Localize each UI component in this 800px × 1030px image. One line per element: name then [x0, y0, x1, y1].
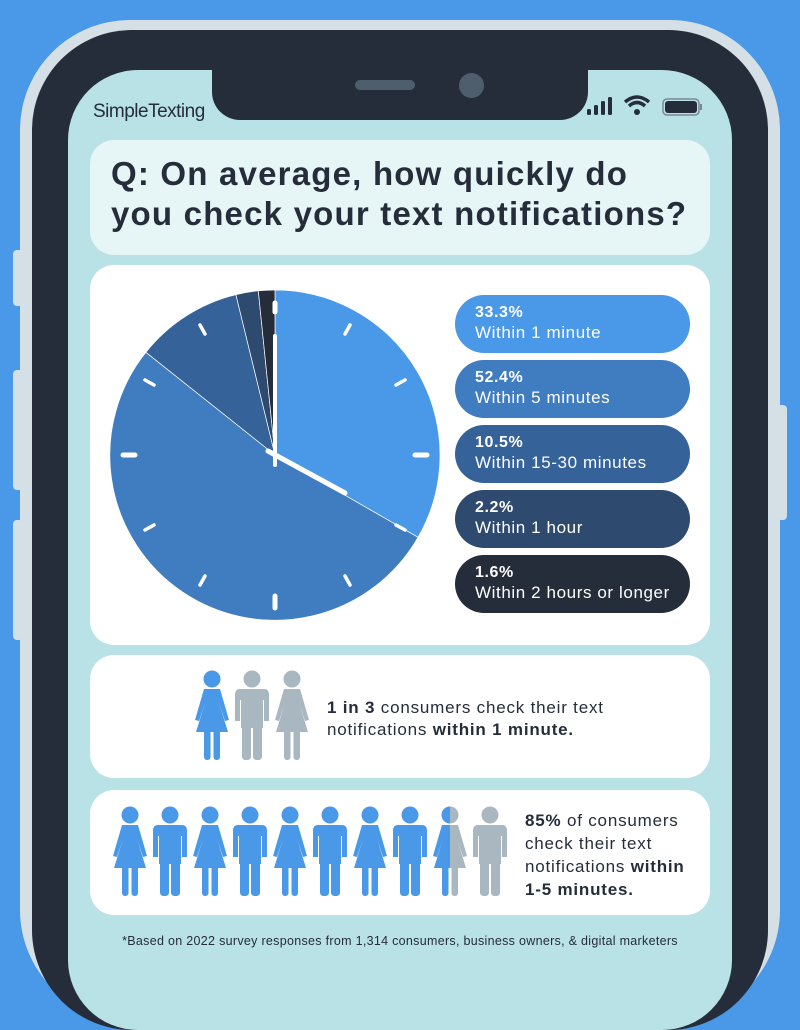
- text: 85%: notifications within: [525, 857, 685, 876]
- side buttons: [13, 250, 23, 306]
- text: 1 in 3: notifications within 1 minute.: [327, 720, 574, 739]
- legend: [455, 295, 690, 613]
- legend item 1: Within 1 minute: [475, 323, 601, 342]
- legend item 4: Within 1 hour: [475, 518, 583, 537]
- panel: 85%: [90, 790, 710, 915]
- text: 85%: check their text: [525, 834, 652, 853]
- footnote: *Based on 2022 survey responses from 1,314 consumers, business owners, & digital marketers: [122, 934, 678, 948]
- legend item 5: Within 2 hours or longer: [475, 583, 670, 602]
- legend item 2: [455, 360, 690, 418]
- legend item 2: 52.4%: [475, 369, 523, 386]
- people icons: 85%: [113, 806, 507, 896]
- notch: [212, 40, 588, 120]
- legend item 4: [455, 490, 690, 548]
- screen: [68, 70, 732, 1030]
- text: 85%: 1-5 minutes.: [525, 880, 634, 899]
- status icons: [587, 95, 702, 116]
- legend item 2: Within 5 minutes: [475, 388, 610, 407]
- legend item 3: 10.5%: [475, 434, 523, 451]
- legend item 4: 2.2%: [475, 499, 514, 516]
- title box: you check your text notifications?: [111, 195, 687, 232]
- legend item 3: [455, 425, 690, 483]
- people icons: 1 in 3: [195, 670, 309, 760]
- text: 1 in 3: [327, 698, 604, 739]
- title box: [90, 140, 710, 255]
- text: 1 in 3: 1 in 3 consumers check their text: [327, 698, 604, 717]
- legend item 5: [455, 555, 690, 613]
- notch speaker & camera: [355, 73, 484, 98]
- logo: SimpleTexting: [93, 101, 205, 122]
- legend item 3: Within 15-30 minutes: [475, 453, 647, 472]
- panel: 1 in 3: [90, 655, 710, 778]
- title box: Q: On average, how quickly do: [111, 155, 628, 192]
- legend item 1: 33.3%: [475, 304, 523, 321]
- panel: chart: [90, 265, 710, 645]
- text: 85%: [525, 811, 685, 899]
- legend item 5: 1.6%: [475, 564, 514, 581]
- legend item 1: [455, 295, 690, 353]
- text: 85%: 85% of consumers: [525, 811, 679, 830]
